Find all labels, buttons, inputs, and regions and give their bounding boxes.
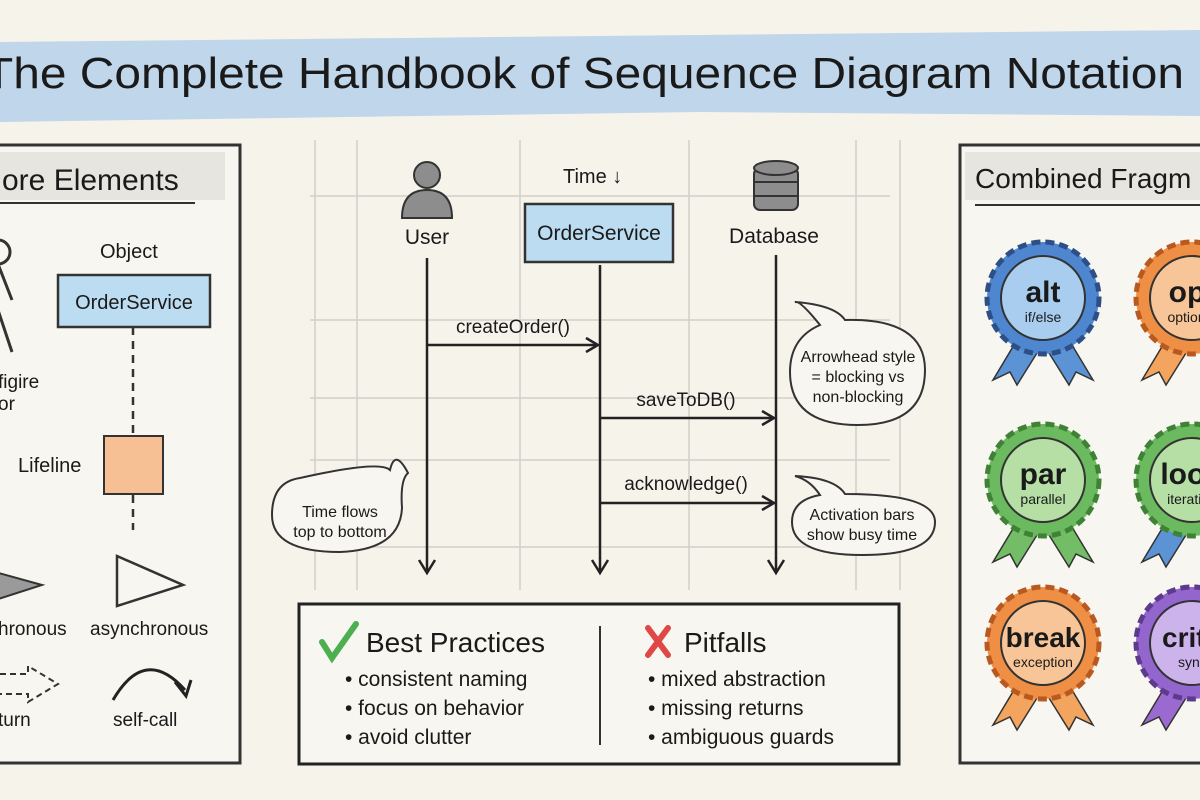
lifeline activation box: Lifeline bbox=[18, 455, 81, 477]
callout: time flows: top to bottom bbox=[293, 524, 387, 541]
participant: user bbox=[402, 162, 452, 249]
label: time: Time ↓ bbox=[563, 166, 622, 188]
heading: core elements: ore Elements bbox=[2, 164, 179, 197]
badge: loop bbox=[1136, 424, 1200, 567]
badge: break: exception bbox=[1013, 654, 1073, 670]
object box bbox=[58, 275, 210, 327]
badge: par: par bbox=[1020, 458, 1067, 491]
message: acknowledge: acknowledge() bbox=[624, 474, 748, 495]
badge: break: break bbox=[1006, 622, 1081, 653]
message: acknowledge bbox=[600, 474, 774, 510]
icon: synchronous arrow bbox=[0, 572, 67, 640]
lifelines bbox=[419, 255, 784, 573]
callout: activation bars: show busy time bbox=[807, 527, 917, 544]
pitfalls: • ambiguous guards bbox=[648, 726, 834, 749]
participant: orderservice: OrderService bbox=[537, 222, 661, 245]
title: The Complete Handbook of Sequence Diagram Notation bbox=[0, 49, 1184, 98]
badge: critical bbox=[1136, 587, 1200, 730]
object box: OrderService bbox=[75, 292, 193, 314]
participant: database bbox=[729, 161, 819, 248]
pitfalls: • missing returns bbox=[648, 697, 804, 720]
message: createOrder: createOrder() bbox=[456, 317, 570, 338]
best practices: • avoid clutter bbox=[345, 726, 471, 749]
badge: alt: alt bbox=[1025, 276, 1061, 309]
grid bbox=[310, 140, 900, 590]
heading: combined fragments: Combined Fragm bbox=[975, 163, 1191, 194]
message: saveToDB: saveToDB() bbox=[636, 390, 736, 411]
message: createOrder bbox=[427, 317, 598, 352]
icon: asynchronous arrow bbox=[90, 556, 208, 640]
icon: return arrow bbox=[0, 666, 58, 702]
callout: arrowhead style: Arrowhead style bbox=[801, 349, 915, 366]
best practices: • focus on behavior bbox=[345, 697, 524, 720]
best practices: Best Practices bbox=[366, 627, 545, 658]
badge: alt bbox=[987, 242, 1099, 385]
label: object: Object bbox=[100, 241, 158, 263]
badge: par: parallel bbox=[1020, 491, 1066, 507]
participant: orderservice bbox=[525, 204, 673, 262]
panel: core elements bbox=[0, 145, 240, 763]
heading: core elements bbox=[0, 152, 225, 203]
message: saveToDB bbox=[600, 390, 774, 425]
lifeline activation box bbox=[18, 436, 163, 494]
heading: combined fragments bbox=[965, 152, 1200, 205]
pitfalls: • mixed abstraction bbox=[648, 668, 826, 691]
icon: synchronous arrow: hronous bbox=[0, 619, 67, 640]
badge: par bbox=[987, 424, 1099, 567]
callout: arrowhead style: = blocking vs bbox=[812, 369, 904, 386]
badge: alt: if/else bbox=[1025, 309, 1061, 325]
participant: database: Database bbox=[729, 225, 819, 248]
panel: best practices and pitfalls bbox=[299, 604, 899, 764]
badge: opt bbox=[1136, 242, 1200, 385]
callout: time flows: Time flows bbox=[302, 504, 378, 521]
icon: self-call bbox=[113, 670, 191, 731]
callout: arrowhead style: non-blocking bbox=[813, 389, 903, 406]
callout: arrowhead style bbox=[790, 302, 925, 425]
icon: asynchronous arrow: asynchronous bbox=[90, 619, 208, 640]
title bbox=[0, 30, 1200, 122]
icon: self-call: self-call bbox=[113, 710, 177, 731]
participant: user: User bbox=[405, 226, 449, 249]
sequence diagram bbox=[272, 161, 935, 573]
pitfalls bbox=[648, 627, 834, 749]
callout: time flows bbox=[272, 460, 408, 552]
icon: stick figure bbox=[0, 240, 12, 352]
pitfalls: Pitfalls bbox=[684, 627, 766, 658]
badge: break bbox=[987, 587, 1099, 730]
callout: activation bars: Activation bars bbox=[810, 507, 914, 524]
best practices bbox=[322, 624, 545, 749]
best practices: • consistent naming bbox=[345, 668, 527, 691]
panel: combined fragments bbox=[960, 145, 1200, 763]
callout: activation bars bbox=[792, 476, 935, 555]
